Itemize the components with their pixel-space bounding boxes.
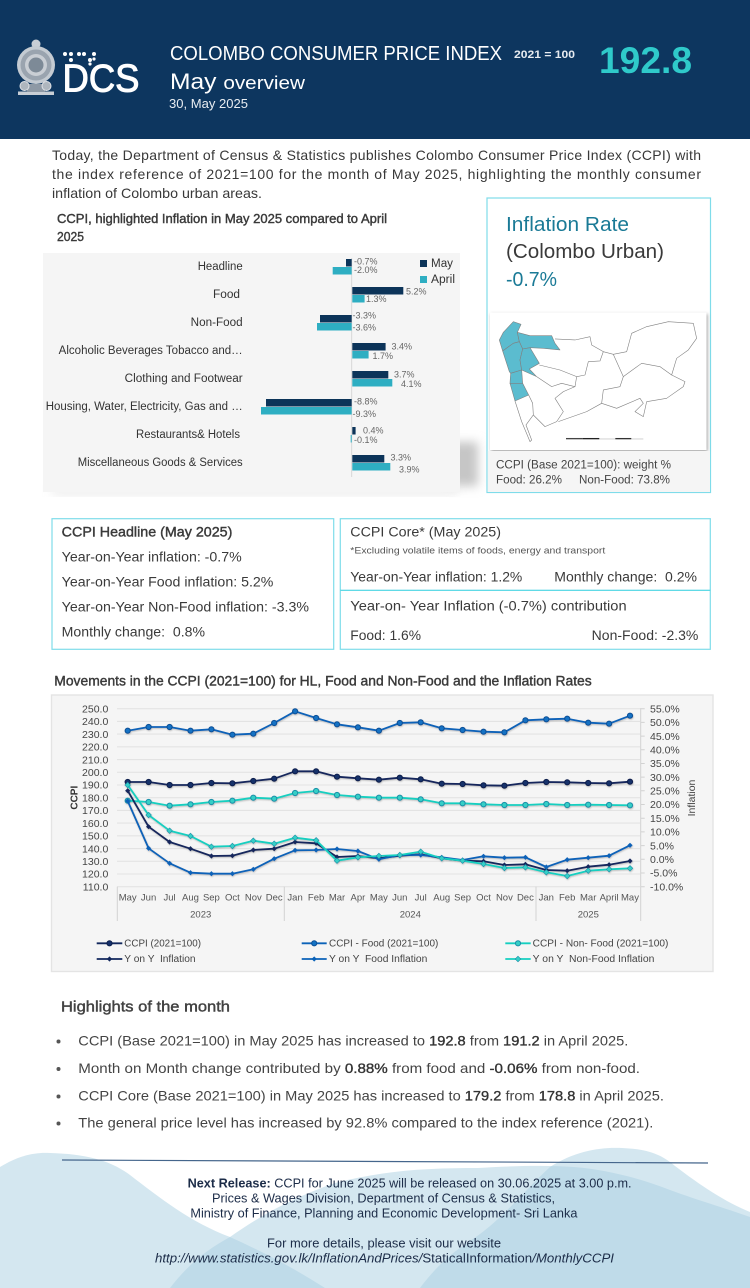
panel: CCPI headline: CCPI Headline (May 2025)	[62, 525, 232, 540]
right axis labels: 10.0%	[650, 827, 680, 839]
footer text	[155, 1176, 632, 1266]
date: 30, May 2025	[169, 97, 248, 111]
month labels: Jan	[287, 893, 303, 904]
month labels: Dec	[517, 893, 534, 904]
category labels: Headline	[198, 261, 243, 273]
right axis labels: 0.0%	[650, 854, 674, 866]
panel: line chart	[52, 695, 713, 972]
series: year on year headline inflation	[128, 791, 630, 871]
intro paragraph	[52, 147, 701, 201]
left axis labels: 240.0	[82, 716, 108, 728]
value labels: 4.1%	[401, 379, 422, 389]
month labels: May	[621, 893, 639, 904]
legend: April	[431, 274, 455, 286]
panel: inflation rate	[487, 198, 710, 492]
highlights list: CCPI (Base 2021=100) in May 2025 has increased to 192.8 from 191.2 in April 2025.	[78, 1033, 628, 1049]
left axis labels: 130.0	[82, 856, 108, 868]
category labels: Restaurants& Hotels	[136, 429, 240, 441]
month labels: Sep	[454, 893, 471, 904]
category labels: Alcoholic Beverages Tobacco and…	[59, 345, 243, 357]
axis titles: CCPI	[70, 786, 80, 810]
title: COLOMBO CONSUMER PRICE INDEX	[170, 43, 502, 65]
month labels: Jul	[415, 893, 427, 904]
bar chart heading: 2025	[57, 230, 84, 244]
left axis labels: 200.0	[82, 767, 108, 779]
category labels	[46, 261, 243, 469]
panel: CCPI core and contribution	[340, 519, 710, 649]
value labels: -2.0%	[354, 265, 378, 275]
value labels: 1.3%	[366, 294, 387, 304]
footer text: Ministry of Finance, Planning and Economic Development- Sri Lanka	[190, 1207, 577, 1221]
intro paragraph: inflation of Colombo urban areas.	[52, 185, 262, 201]
value labels: 3.3%	[390, 452, 411, 462]
left axis labels	[82, 703, 108, 893]
left axis labels: 220.0	[82, 742, 108, 754]
intro paragraph: the index reference of 2021=100 for the month of May 2025, highlighting the monthly consumer	[52, 166, 701, 182]
month labels: April	[600, 893, 619, 904]
month labels: 2025	[578, 910, 599, 921]
footer text: Next Release: CCPI for June 2025 will be released on 30.06.2025 at 3.00 p.m.	[188, 1176, 632, 1190]
month labels: Jun	[141, 893, 156, 904]
panel: CCPI headline: Year-on-Year Food inflation: 5.2%	[62, 575, 273, 590]
right axis labels	[650, 703, 683, 893]
value labels	[352, 256, 427, 474]
value labels: -0.7%	[354, 256, 378, 266]
panel: CCPI core and contribution: Year-on-Year inflation: 1.2%	[350, 570, 522, 585]
highlights heading: Highlights of the month	[61, 999, 230, 1016]
right axis labels: 55.0%	[650, 703, 680, 715]
month labels: 2023	[190, 910, 211, 921]
left axis labels: 120.0	[82, 869, 108, 881]
line chart heading: Movements in the CCPI (2021=100) for HL, Food and Non-Food and the Inflation Rates	[54, 674, 592, 689]
inflation rate heading: Inflation Rate	[506, 214, 629, 236]
chart legend: CCPI - Non- Food (2021=100)	[533, 938, 668, 950]
right axis labels: -10.0%	[650, 881, 683, 893]
series: CCPI food	[128, 711, 630, 735]
map of Colombo urban area	[490, 312, 706, 450]
value labels: -3.3%	[352, 310, 376, 320]
inflation rate heading: (Colombo Urban)	[506, 241, 664, 263]
month labels: Jul	[164, 893, 176, 904]
month labels: 2024	[400, 910, 421, 921]
value labels: 5.2%	[406, 286, 427, 296]
category labels: Food	[213, 289, 240, 301]
axis titles	[70, 779, 698, 816]
bar chart heading: CCPI, highlighted Inflation in May 2025 compared to April	[57, 212, 387, 226]
value labels: -9.3%	[352, 409, 376, 419]
month labels: Aug	[182, 893, 199, 904]
value labels: 3.4%	[392, 342, 412, 352]
icon: national emblem	[17, 40, 55, 95]
footer text: For more details, please visit our website	[267, 1237, 501, 1251]
month labels: Dec	[266, 893, 283, 904]
month labels: May	[370, 893, 388, 904]
index reference: 2021 = 100	[514, 49, 575, 61]
month labels: Aug	[433, 893, 450, 904]
highlights list: The general price level has increased by 92.8% compared to the index reference (2021).	[78, 1115, 653, 1131]
left axis labels: 210.0	[82, 754, 108, 766]
line series	[128, 711, 630, 876]
right axis labels: 35.0%	[650, 758, 680, 770]
value labels: 0.4%	[363, 426, 384, 436]
category labels: Clothing and Footwear	[125, 373, 243, 385]
value labels: 1.7%	[372, 351, 393, 361]
value labels: -0.1%	[354, 435, 378, 445]
month labels: Jun	[392, 893, 407, 904]
panel: bar chart	[43, 253, 478, 494]
month labels: Feb	[308, 893, 324, 904]
panel: CCPI core and contribution: Year-on- Year Inflation (-0.7%) contribution	[350, 599, 627, 614]
left axis labels: 110.0	[83, 881, 108, 893]
right axis labels: -5.0%	[650, 868, 677, 880]
value labels: 3.9%	[399, 464, 420, 474]
footer text: Prices & Wages Division, Department of Census & Statistics,	[212, 1192, 555, 1206]
header band	[0, 0, 750, 139]
category labels: Miscellaneous Goods & Services	[78, 457, 243, 469]
inflation rate heading: -0.7%	[506, 269, 557, 291]
value labels: -8.8%	[354, 396, 378, 406]
legend	[420, 258, 455, 286]
left axis labels: 140.0	[82, 843, 108, 855]
month labels: Nov	[496, 893, 513, 904]
series: year on year food inflation	[128, 801, 630, 874]
highlights list: CCPI Core (Base 2021=100) in May 2025 has increased to 179.2 from 178.8 in April 2025.	[78, 1087, 664, 1103]
category labels: Housing, Water, Electricity, Gas and …	[46, 401, 243, 413]
series: CCPI headline	[128, 771, 630, 786]
chart legend: Y on Y Food Inflation	[329, 954, 427, 965]
month labels: Mar	[329, 893, 345, 904]
subtitle: May overview	[170, 69, 306, 94]
bar chart heading	[57, 212, 387, 244]
highlights list	[56, 1033, 664, 1131]
left axis labels: 170.0	[82, 805, 108, 817]
left axis labels: 190.0	[82, 780, 108, 792]
category labels: Non-Food	[191, 317, 243, 329]
month labels: Mar	[580, 893, 596, 904]
left axis labels: 160.0	[82, 818, 108, 830]
chart legend: Y on Y Non-Food Inflation	[533, 954, 654, 965]
panel: CCPI headline: Monthly change: 0.8%	[62, 625, 205, 640]
left axis labels: 230.0	[82, 729, 108, 741]
right axis labels: 45.0%	[650, 731, 680, 743]
weights: Food: 26.2%	[496, 474, 562, 486]
weights: CCPI (Base 2021=100): weight %	[496, 459, 671, 471]
highlights list: Month on Month change contributed by 0.88% from food and -0.06% from non-food.	[78, 1060, 640, 1076]
bars: May	[266, 259, 403, 462]
legend: May	[431, 258, 453, 270]
panel: CCPI core and contribution: *Excluding volatile items of foods, energy and transport	[350, 545, 606, 556]
right axis labels: 15.0%	[650, 813, 680, 825]
month labels: Nov	[245, 893, 262, 904]
panel: CCPI headline	[52, 519, 334, 649]
headline index value: 192.8	[599, 40, 692, 81]
panel: CCPI core and contribution: Monthly change: 0.2%	[554, 570, 697, 585]
chart legend	[97, 938, 668, 965]
weights	[488, 451, 710, 492]
month labels: Jan	[539, 893, 554, 904]
value labels: 3.7%	[394, 370, 415, 380]
intro paragraph: Today, the Department of Census & Statistics publishes Colombo Consumer Price Index (CCPI) with	[52, 147, 701, 163]
panel: CCPI core and contribution: Non-Food: -2.3%	[592, 628, 698, 643]
left axis labels: 180.0	[82, 792, 108, 804]
inflation rate heading	[506, 214, 664, 291]
right axis labels: 20.0%	[650, 799, 680, 811]
right axis labels: 25.0%	[650, 786, 680, 798]
right axis labels: 5.0%	[650, 840, 674, 852]
month labels: Oct	[476, 893, 491, 904]
panel: CCPI core and contribution: Food: 1.6%	[350, 628, 421, 643]
panel: CCPI headline: Year-on-Year Non-Food inflation: -3.3%	[62, 600, 309, 615]
month labels: May	[119, 893, 137, 904]
right axis labels: 50.0%	[650, 717, 680, 729]
right axis labels: 30.0%	[650, 772, 680, 784]
panel: CCPI headline: Year-on-Year inflation: -0.7%	[62, 550, 242, 565]
chart legend: Y on Y Inflation	[124, 954, 196, 965]
chart legend: CCPI - Food (2021=100)	[329, 938, 438, 950]
month labels: Feb	[559, 893, 575, 904]
axis titles: Inflation	[686, 779, 698, 816]
series: CCPI non-food	[128, 791, 630, 806]
month labels: Oct	[225, 893, 240, 904]
logo: DCS: DCS	[62, 58, 140, 100]
weights: Non-Food: 73.8%	[579, 474, 670, 486]
series: year on year non-food inflation	[128, 785, 630, 876]
month labels	[119, 893, 639, 921]
left axis labels: 150.0	[82, 830, 108, 842]
background waves	[0, 1148, 750, 1288]
bars: April	[261, 267, 392, 470]
value labels: -3.6%	[352, 322, 376, 332]
month labels: Sep	[203, 893, 220, 904]
chart legend: CCPI (2021=100)	[124, 938, 201, 950]
left axis labels: 250.0	[82, 703, 108, 715]
right axis labels: 40.0%	[650, 744, 680, 756]
month labels: Apr	[351, 893, 365, 904]
footer text: http://www.statistics.gov.lk/InflationAndPrices/ StaticalInformation /MonthlyCCPI	[155, 1252, 615, 1266]
panel: CCPI core and contribution: CCPI Core* (May 2025)	[350, 525, 501, 540]
